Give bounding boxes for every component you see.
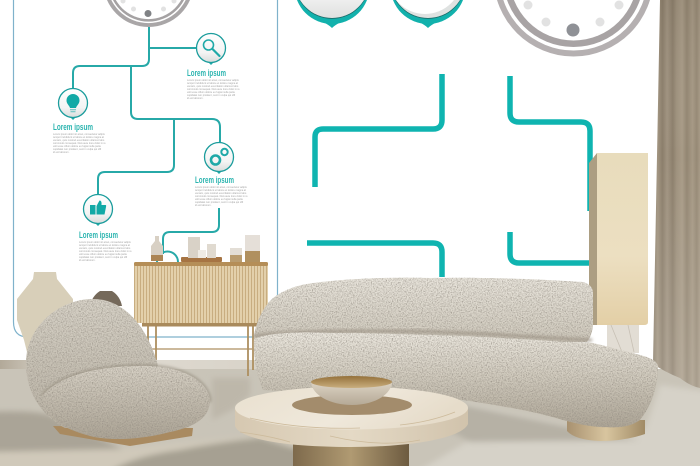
- baseboard: [0, 360, 260, 370]
- text block: light bulb: veniam, quis nostrud exercitation ullamco labo: [53, 139, 105, 142]
- text block: thumbs up: veniam, quis nostrud exercitation ullamco labo: [79, 247, 131, 250]
- text block: gears: Lorem ipsum: [195, 175, 234, 185]
- text block: gears: [195, 175, 248, 207]
- text block: gears: tempor incididunt ut labore et dolore magna al: [195, 189, 246, 192]
- woven mat: [292, 395, 412, 415]
- icon: gears pin: [204, 142, 234, 174]
- large pin: left: [294, 0, 370, 28]
- text block: magnifier: tempor incididunt ut labore et dolore magna al: [187, 82, 238, 85]
- icon: thumbs up pin: [84, 194, 112, 226]
- decor on cabinet: [151, 235, 260, 262]
- text block: magnifier: veniam, quis nostrud exercitation ullamco labo: [187, 85, 239, 88]
- text block: thumbs up: Lorem ipsum: [79, 230, 118, 240]
- text block: light bulb: commodo consequat. Duis aute irure dolor in re: [53, 142, 106, 145]
- cabinet: [134, 262, 268, 376]
- floor lamp: [589, 153, 648, 353]
- text block: thumbs up: tempor incididunt ut labore et dolore magna al: [79, 244, 130, 247]
- text block: gears: velit esse cillum dolore eu fugiat nulla paria: [195, 198, 243, 201]
- text block: thumbs up: velit esse cillum dolore eu fugiat nulla paria: [79, 253, 127, 256]
- text block: gears: id est laborum.: [195, 204, 212, 207]
- text block: thumbs up: [79, 230, 132, 262]
- lounge chair: [26, 299, 210, 446]
- sofa: [254, 278, 658, 441]
- text block: magnifier: velit esse cillum dolore eu fugiat nulla paria: [187, 91, 235, 94]
- small clock at top of left panel: [103, 0, 194, 27]
- curtain: [653, 0, 700, 388]
- text block: gears: cupidatat non proident, sunt in culpa qui offi: [195, 201, 244, 204]
- text block: light bulb: tempor incididunt ut labore et dolore magna al: [53, 136, 104, 139]
- floor rug: [0, 369, 700, 466]
- text block: light bulb: Lorem ipsum dolor sit amet, consectetur adipis: [53, 133, 105, 136]
- text block: magnifier: commodo consequat. Duis aute irure dolor in re: [187, 88, 240, 91]
- text block: magnifier: [187, 68, 240, 100]
- text block: light bulb: [53, 122, 106, 154]
- text block: thumbs up: id est laborum.: [79, 259, 96, 262]
- text block: thumbs up: commodo consequat. Duis aute irure dolor in re: [79, 250, 132, 253]
- thin teal flow lines: [73, 27, 220, 262]
- icon: light bulb pin: [58, 88, 88, 120]
- wall background: [0, 0, 700, 370]
- panel: left infographic frame: [14, 0, 278, 337]
- text block: light bulb: velit esse cillum dolore eu fugiat nulla paria: [53, 145, 101, 148]
- text block: gears: commodo consequat. Duis aute irure dolor in re: [195, 195, 248, 198]
- text block: magnifier: id est laborum.: [187, 97, 204, 100]
- text block: gears: Lorem ipsum dolor sit amet, consectetur adipis: [195, 186, 247, 189]
- text block: magnifier: Lorem ipsum: [187, 68, 226, 78]
- large clock cropped at top of middle panel: [494, 0, 654, 56]
- dark vase: [90, 291, 122, 306]
- icon: magnifier pin: [196, 34, 226, 65]
- text block: magnifier: cupidatat non proident, sunt in culpa qui offi: [187, 94, 236, 97]
- coffee table: [235, 376, 468, 466]
- text block: thumbs up: cupidatat non proident, sunt in culpa qui offi: [79, 256, 128, 259]
- text block: light bulb: Lorem ipsum: [53, 122, 93, 132]
- large pin: right: [388, 0, 466, 28]
- large vase: [17, 272, 73, 356]
- text block: magnifier: Lorem ipsum dolor sit amet, consectetur adipis: [187, 79, 239, 82]
- bowl: [311, 376, 392, 405]
- text block: thumbs up: Lorem ipsum dolor sit amet, consectetur adipis: [79, 241, 131, 244]
- text block: light bulb: cupidatat non proident, sunt in culpa qui offi: [53, 148, 102, 151]
- text block: gears: veniam, quis nostrud exercitation ullamco labo: [195, 192, 247, 195]
- text block: light bulb: id est laborum.: [53, 151, 70, 154]
- thick teal connectors: [307, 74, 592, 277]
